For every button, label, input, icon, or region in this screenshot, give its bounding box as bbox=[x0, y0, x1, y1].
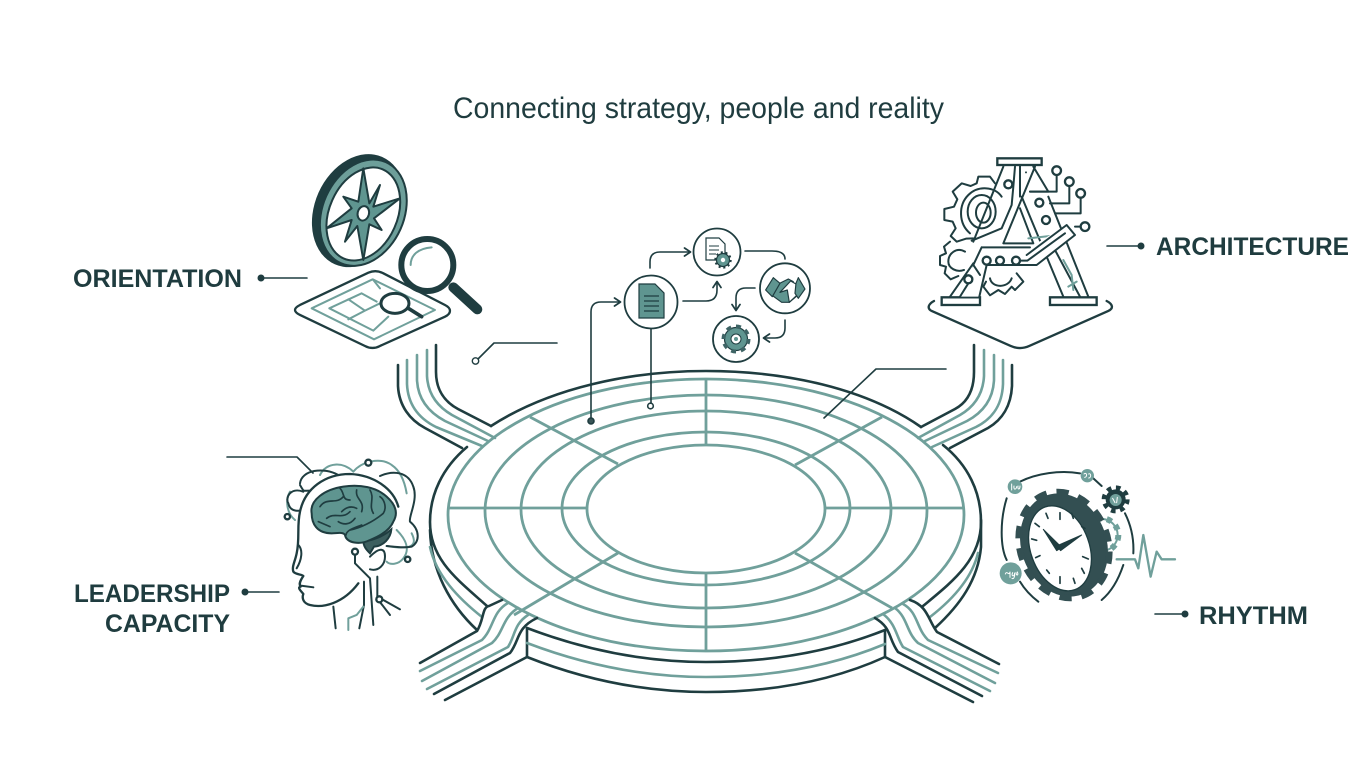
main gear bbox=[1004, 479, 1124, 611]
label: leadership capacity bbox=[74, 580, 279, 638]
label: rhythm: RHYTHM bbox=[1199, 602, 1308, 630]
orbit ring bbox=[1002, 472, 1133, 602]
flow node: handshake bbox=[760, 263, 810, 313]
big magnifier bbox=[401, 239, 477, 309]
connector band: bottom left bbox=[420, 600, 537, 700]
small magnifier bbox=[381, 293, 422, 317]
callout: top left bbox=[472, 343, 557, 364]
pulse line bbox=[1117, 535, 1175, 577]
brain bbox=[311, 486, 396, 553]
title: Connecting strategy, people and reality bbox=[453, 92, 944, 125]
teal gear behind bbox=[1085, 518, 1118, 552]
label: leadership capacity: LEADERSHIP bbox=[74, 580, 230, 608]
icon: compass and map bbox=[295, 139, 477, 348]
map bbox=[295, 271, 450, 348]
connector band: top left bbox=[398, 345, 495, 448]
disc rim and side wall bbox=[430, 371, 981, 692]
icon: clock gear rhythm bbox=[1000, 469, 1175, 611]
label: rhythm bbox=[1155, 602, 1308, 630]
connector band: top right bbox=[918, 345, 1012, 448]
flow connectors bbox=[588, 251, 785, 424]
label: architecture: ARCHITECTURE bbox=[1156, 233, 1349, 261]
gears bbox=[940, 177, 1023, 295]
flow node: gear bbox=[713, 316, 759, 362]
compass bbox=[295, 139, 423, 282]
central platform disc bbox=[398, 345, 1012, 702]
disc spokes bbox=[448, 379, 964, 651]
small dark gear bbox=[1104, 488, 1127, 511]
label: orientation: ORIENTATION bbox=[73, 265, 242, 293]
flow node: document bbox=[624, 276, 678, 328]
icon: brain and head bbox=[285, 460, 418, 630]
connector band: bottom right bbox=[875, 600, 999, 702]
orbit lines bbox=[287, 461, 418, 564]
letter A bbox=[942, 158, 1097, 305]
icon: architecture letter A with gears bbox=[940, 158, 1097, 305]
process flow diagram bbox=[588, 228, 810, 424]
label: leadership capacity: CAPACITY bbox=[105, 610, 230, 638]
icon: architecture base tray bbox=[929, 301, 1112, 348]
circuit crossbar and nodes bbox=[960, 166, 1089, 297]
disc rings bbox=[448, 379, 964, 651]
head profile bbox=[285, 460, 410, 630]
clock face bbox=[1017, 497, 1103, 600]
flow node: document with gear bbox=[694, 228, 740, 276]
callout: top right bbox=[824, 369, 946, 418]
callout: leadership bbox=[227, 457, 313, 473]
teal badges bbox=[1000, 469, 1094, 584]
